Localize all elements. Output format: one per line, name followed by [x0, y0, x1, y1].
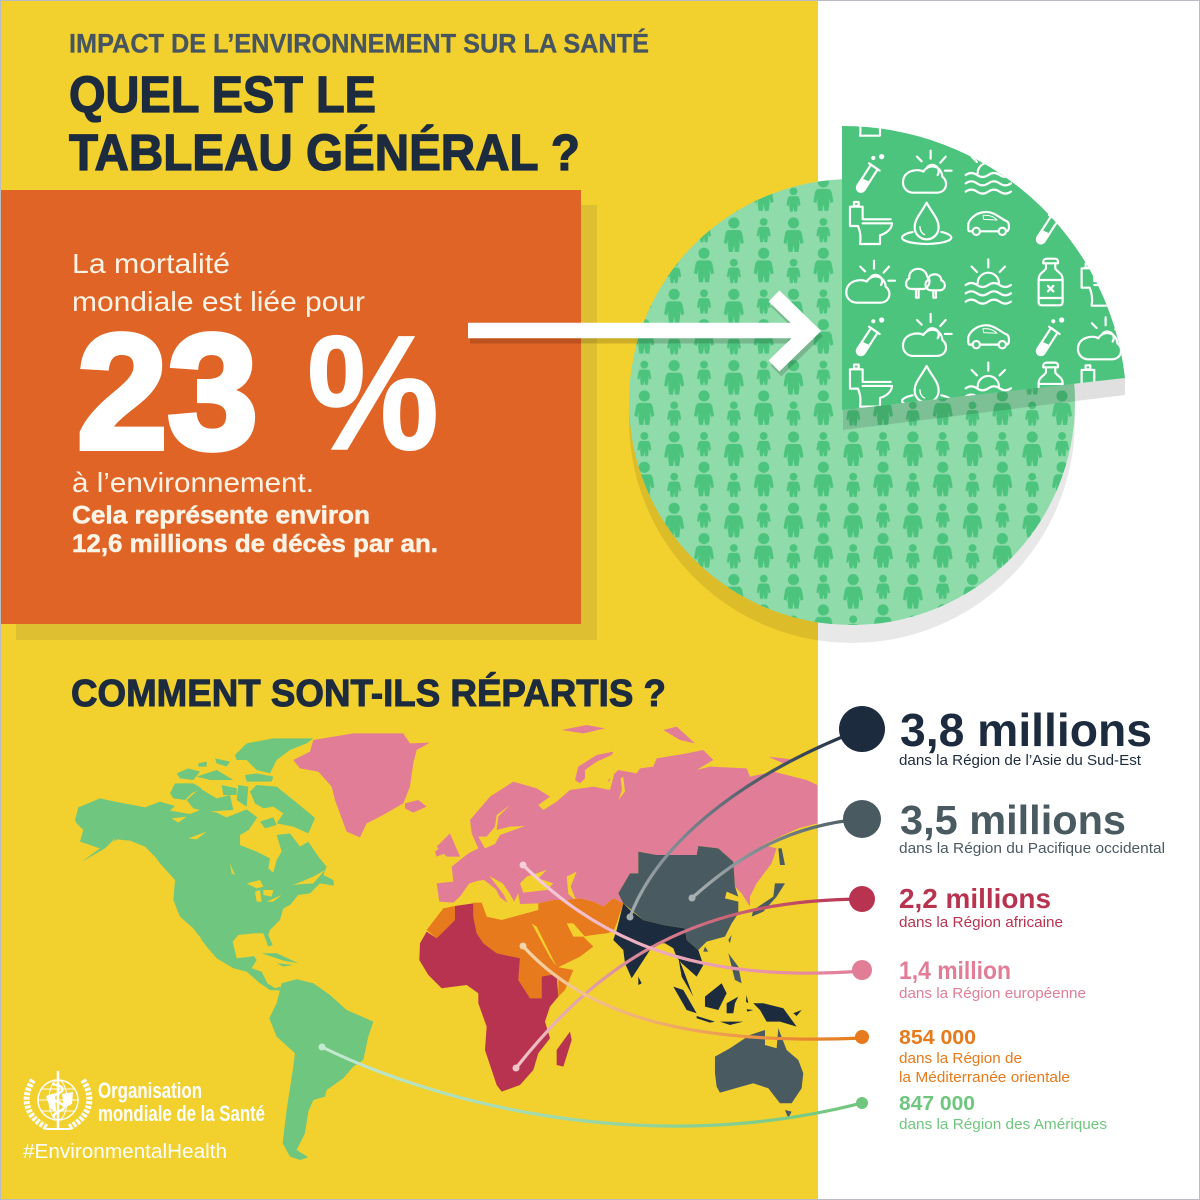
text: intro — [72, 248, 365, 317]
map: Western Pacific — [618, 846, 803, 1118]
text: intro: mondiale est liée pour — [72, 286, 365, 317]
title — [69, 66, 580, 181]
map: South-East Asia — [613, 903, 802, 1027]
connector lines — [318, 729, 862, 1126]
logo text: WHO name: Organisation — [98, 1078, 202, 1103]
legend: Western Pacific — [843, 797, 1165, 857]
title: TABLEAU GÉNÉRAL ? — [69, 124, 580, 181]
pie chart: 23 percent — [629, 94, 1127, 643]
text: conclusion: Cela représente environ — [72, 502, 370, 530]
legend: Western Pacific: 3,5 millions — [900, 797, 1126, 843]
legend: Western Pacific: dans la Région du Pacifique occidental — [899, 840, 1165, 857]
legend: Europe — [852, 957, 1086, 1002]
map: Europe and Russia — [435, 725, 817, 907]
map: Middle East — [427, 898, 623, 998]
wedge shadow — [843, 378, 1125, 430]
icon: WHO emblem — [27, 1071, 89, 1129]
legend: Eastern Mediterranean: 854 000 — [899, 1027, 976, 1049]
text: conclusion: 12,6 millions de décès par an. — [72, 530, 438, 558]
legend: Americas: dans la Région des Amériques — [899, 1116, 1107, 1133]
heading: kicker: IMPACT DE L’ENVIRONNEMENT SUR LA SANTÉ — [69, 28, 649, 58]
title: QUEL EST LE — [69, 66, 376, 123]
legend: Eastern Mediterranean: la Méditerranée orientale — [899, 1069, 1070, 1086]
big number: % — [307, 301, 439, 484]
wedge: environment — [842, 126, 1125, 410]
map: Africa — [419, 903, 572, 1092]
legend: Americas: 847 000 — [899, 1093, 975, 1115]
disc: all deaths — [629, 179, 1075, 625]
panel: mortality — [0, 190, 597, 640]
legend: Americas — [856, 1093, 1107, 1133]
legend: Eastern Mediterranean — [855, 1027, 1070, 1086]
legend: South-East Asia — [839, 704, 1152, 769]
text: intro: La mortalité — [72, 248, 230, 279]
map: Americas — [75, 738, 373, 1160]
arrow — [468, 296, 812, 371]
legend: Africa: dans la Région africaine — [899, 914, 1063, 931]
text: conclusion: à l’environnement. — [72, 467, 314, 498]
legend: Africa: 2,2 millions — [899, 883, 1051, 914]
hashtag: #EnvironmentalHealth — [23, 1141, 227, 1163]
logo text: WHO name — [98, 1078, 265, 1126]
map: Greenland and Iceland — [293, 733, 430, 837]
legend: South-East Asia: dans la Région de l’Asie du Sud-Est — [899, 752, 1142, 769]
disc shadow — [629, 197, 1075, 643]
big number: 23 — [77, 300, 258, 483]
text: conclusion — [72, 467, 438, 558]
legend: Europe: 1,4 million — [899, 957, 1011, 985]
legend: Eastern Mediterranean: dans la Région de — [899, 1050, 1022, 1067]
legend: Africa — [849, 883, 1063, 931]
heading: distribution: COMMENT SONT-ILS RÉPARTIS ? — [71, 671, 666, 715]
legend: Europe: dans la Région européenne — [899, 985, 1086, 1002]
world map — [75, 725, 817, 1160]
logo text: WHO name: mondiale de la Santé — [98, 1101, 265, 1126]
big number — [77, 300, 439, 484]
legend: South-East Asia: 3,8 millions — [900, 704, 1152, 756]
